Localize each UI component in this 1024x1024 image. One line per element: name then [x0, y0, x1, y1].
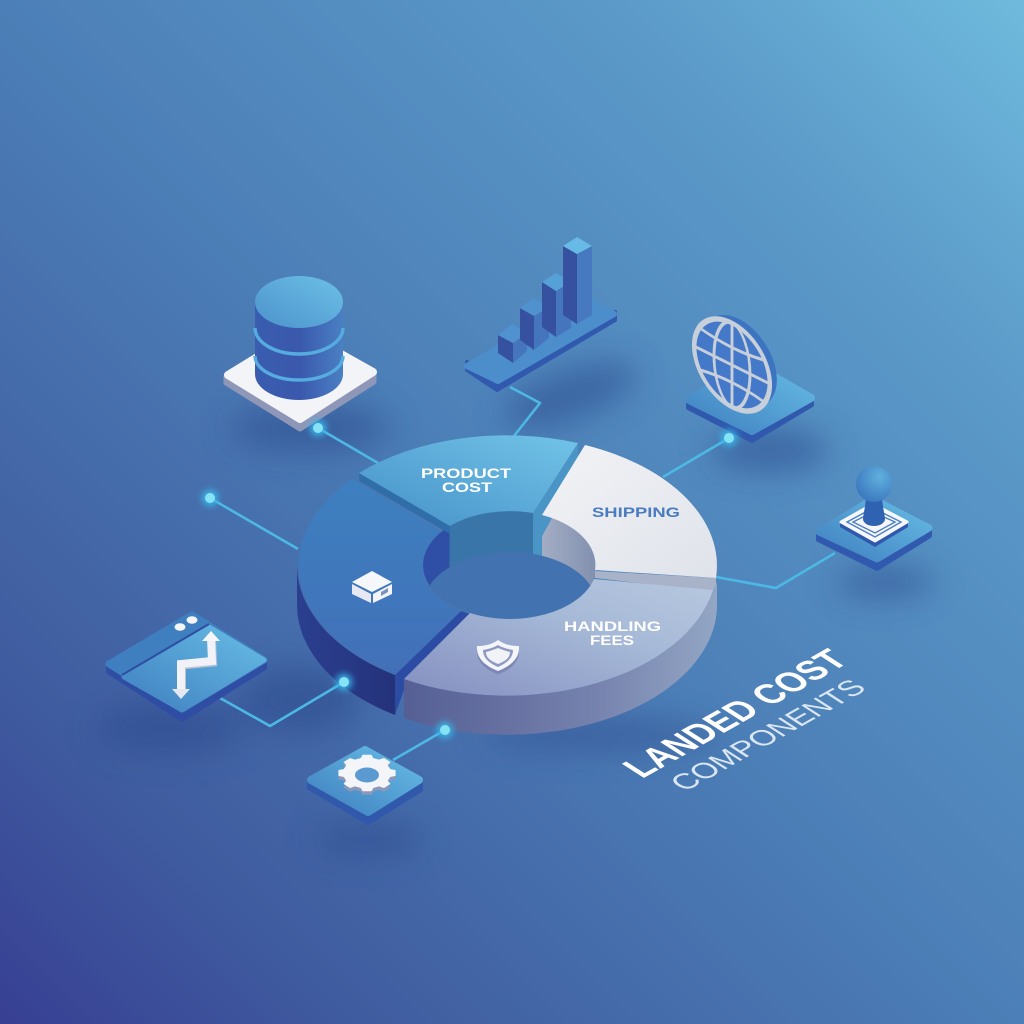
label: shipping: SHIPPING — [592, 504, 680, 520]
icon: database on white platform — [226, 276, 374, 429]
segment: item box (dark blue) — [297, 479, 470, 715]
label: product cost — [421, 465, 512, 495]
icon: joystick on platform — [818, 466, 930, 569]
bar 4 — [563, 237, 592, 324]
donut chart — [297, 435, 717, 735]
segment: shipping — [542, 445, 717, 592]
label: product cost: PRODUCT — [421, 465, 512, 481]
label: handling fees — [564, 618, 661, 648]
icon: box — [352, 571, 392, 603]
donut hole — [423, 511, 596, 619]
icon: gear on platform — [309, 750, 421, 823]
title: LANDED COST — [614, 644, 858, 784]
icon: globe on platform — [688, 300, 812, 441]
label: handling fees: FEES — [590, 632, 634, 648]
title: COMPONENTS — [663, 675, 874, 796]
icon: shield — [477, 640, 519, 674]
icon: route chart panel — [108, 615, 265, 720]
connector nodes — [202, 420, 737, 738]
zigzag arrow — [172, 631, 220, 699]
bar 3 — [542, 273, 571, 337]
segment: product cost — [359, 435, 578, 553]
bar 2 — [520, 298, 549, 350]
soft shadows — [95, 349, 935, 856]
label: handling fees: HANDLING — [564, 618, 661, 634]
icon: bar chart on platform — [467, 237, 615, 390]
bar 1 — [498, 324, 527, 363]
connector lines — [210, 387, 835, 760]
window dots — [174, 616, 198, 631]
label: product cost: COST — [442, 479, 493, 495]
segment: handling fees — [404, 579, 717, 735]
